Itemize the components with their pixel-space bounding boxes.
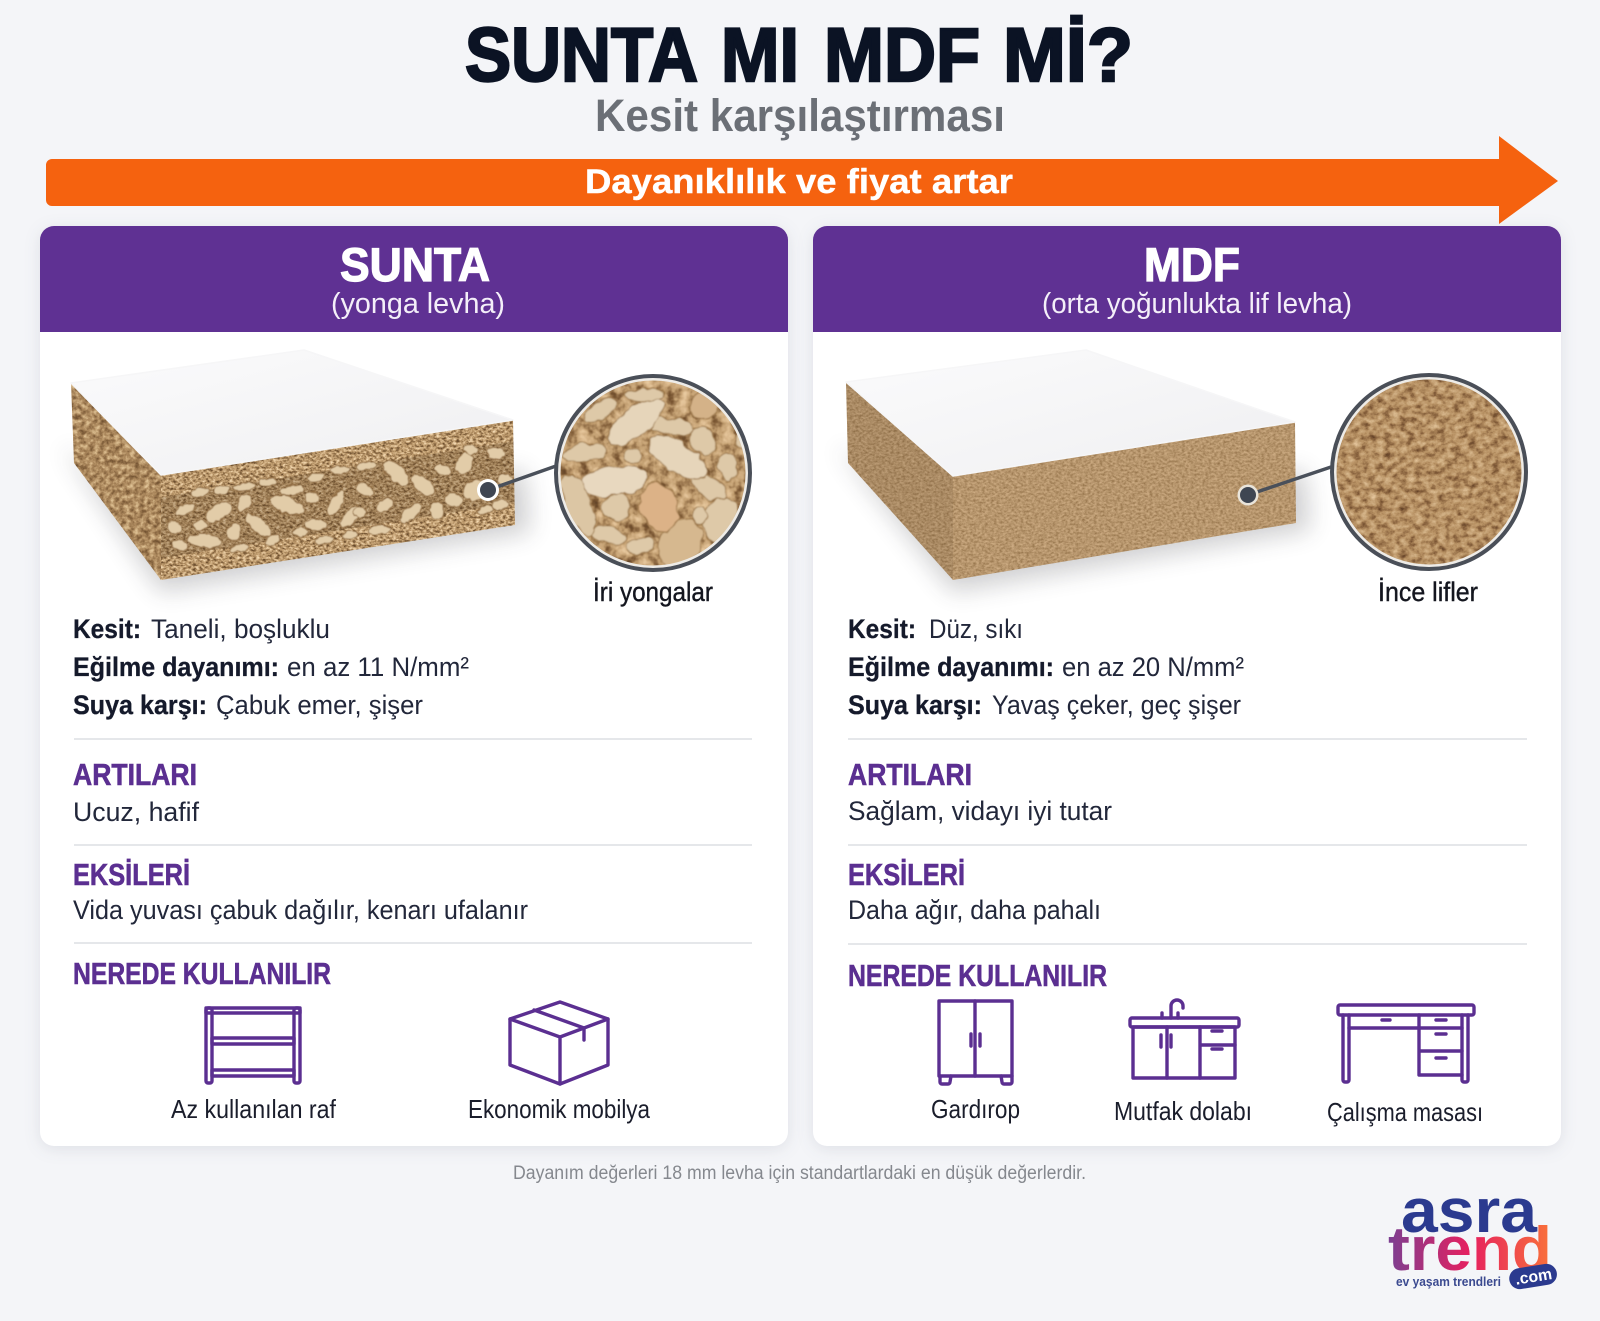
properties: Eğilme dayanımı:	[848, 652, 1054, 682]
cons	[73, 857, 528, 925]
properties: en az 20 N/mm²	[1062, 652, 1244, 682]
icon: shelf	[206, 1008, 300, 1083]
logo: asratrend.com: trend	[1388, 1215, 1552, 1284]
title	[465, 13, 1133, 98]
arrow: durability and price increase: Dayanıklılık ve fiyat artar	[585, 163, 1013, 201]
callout label: fine fibres: İnce lifler	[1378, 576, 1478, 607]
properties: Suya karşı:	[848, 690, 982, 720]
icon: box	[510, 1002, 608, 1084]
cons	[848, 857, 1101, 925]
properties	[848, 614, 1244, 720]
properties: Suya karşı:	[73, 690, 207, 720]
panel header: MDF	[813, 226, 1561, 332]
callout marker	[477, 466, 556, 501]
cons: EKSİLERİ	[73, 857, 190, 892]
cons: EKSİLERİ	[848, 857, 965, 892]
panel header: MDF: MDF	[1144, 238, 1240, 291]
icon: kitchen cabinet	[1130, 1000, 1239, 1078]
properties: Yavaş çeker, geç şişer	[992, 690, 1241, 720]
title: SUNTA	[465, 13, 698, 98]
label: economical furniture: Ekonomik mobilya	[468, 1094, 650, 1124]
properties: en az 11 N/mm²	[287, 652, 469, 682]
footnote: Dayanım değerleri 18 mm levha için standartlardaki en düşük değerlerdir.	[513, 1163, 1086, 1184]
logo: asratrend.com	[1388, 1177, 1558, 1291]
panel header: SUNTA: (yonga levha)	[331, 288, 505, 320]
magnified circle: fine fibres	[1332, 375, 1526, 569]
uses heading: NEREDE KULLANILIR	[73, 956, 331, 991]
board cross-section: particle board	[62, 350, 556, 592]
pros	[73, 757, 199, 827]
properties: Taneli, boşluklu	[151, 614, 330, 644]
label: desk: Çalışma masası	[1327, 1097, 1483, 1127]
properties: Kesit:	[73, 614, 141, 644]
properties: Kesit:	[848, 614, 916, 644]
panel header: SUNTA: SUNTA	[340, 238, 490, 291]
logo: asratrend.com: .com	[1514, 1266, 1553, 1289]
pros	[848, 757, 1112, 826]
panel header: MDF: (orta yoğunlukta lif levha)	[1042, 288, 1352, 320]
logo: asratrend.com: asra	[1401, 1177, 1538, 1246]
title: MI	[721, 13, 799, 98]
label: wardrobe: Gardırop	[931, 1094, 1020, 1124]
cons: Vida yuvası çabuk dağılır, kenarı ufalanır	[73, 895, 528, 925]
properties: Düz, sıkı	[929, 614, 1023, 644]
icon: desk	[1338, 1005, 1474, 1082]
icon: wardrobe	[939, 1001, 1012, 1084]
pros: ARTILARI	[73, 757, 197, 792]
cons: Daha ağır, daha pahalı	[848, 895, 1101, 925]
properties	[73, 614, 469, 720]
subtitle: Kesit karşılaştırması	[595, 90, 1005, 141]
panel: MDF	[813, 226, 1561, 1146]
callout label: large chips: İri yongalar	[593, 576, 713, 607]
label: kitchen cabinet: Mutfak dolabı	[1114, 1096, 1252, 1126]
callout marker	[1238, 467, 1331, 506]
panel header: SUNTA	[40, 226, 788, 332]
label: shelf: Az kullanılan raf	[171, 1094, 337, 1124]
magnified circle: large chips	[554, 376, 753, 576]
arrow: durability and price increase	[46, 136, 1558, 224]
properties: Eğilme dayanımı:	[73, 652, 279, 682]
panel: SUNTA	[40, 226, 788, 1146]
pros: ARTILARI	[848, 757, 972, 792]
board cross-section: MDF	[836, 350, 1331, 592]
title: MDF	[824, 13, 980, 98]
pros: Sağlam, vidayı iyi tutar	[848, 796, 1112, 826]
logo: asratrend.com: ev yaşam trendleri	[1396, 1274, 1501, 1289]
uses heading: NEREDE KULLANILIR	[848, 958, 1107, 993]
pros: Ucuz, hafif	[73, 797, 199, 827]
title: Mİ?	[1003, 13, 1133, 98]
properties: Çabuk emer, şişer	[216, 690, 423, 720]
